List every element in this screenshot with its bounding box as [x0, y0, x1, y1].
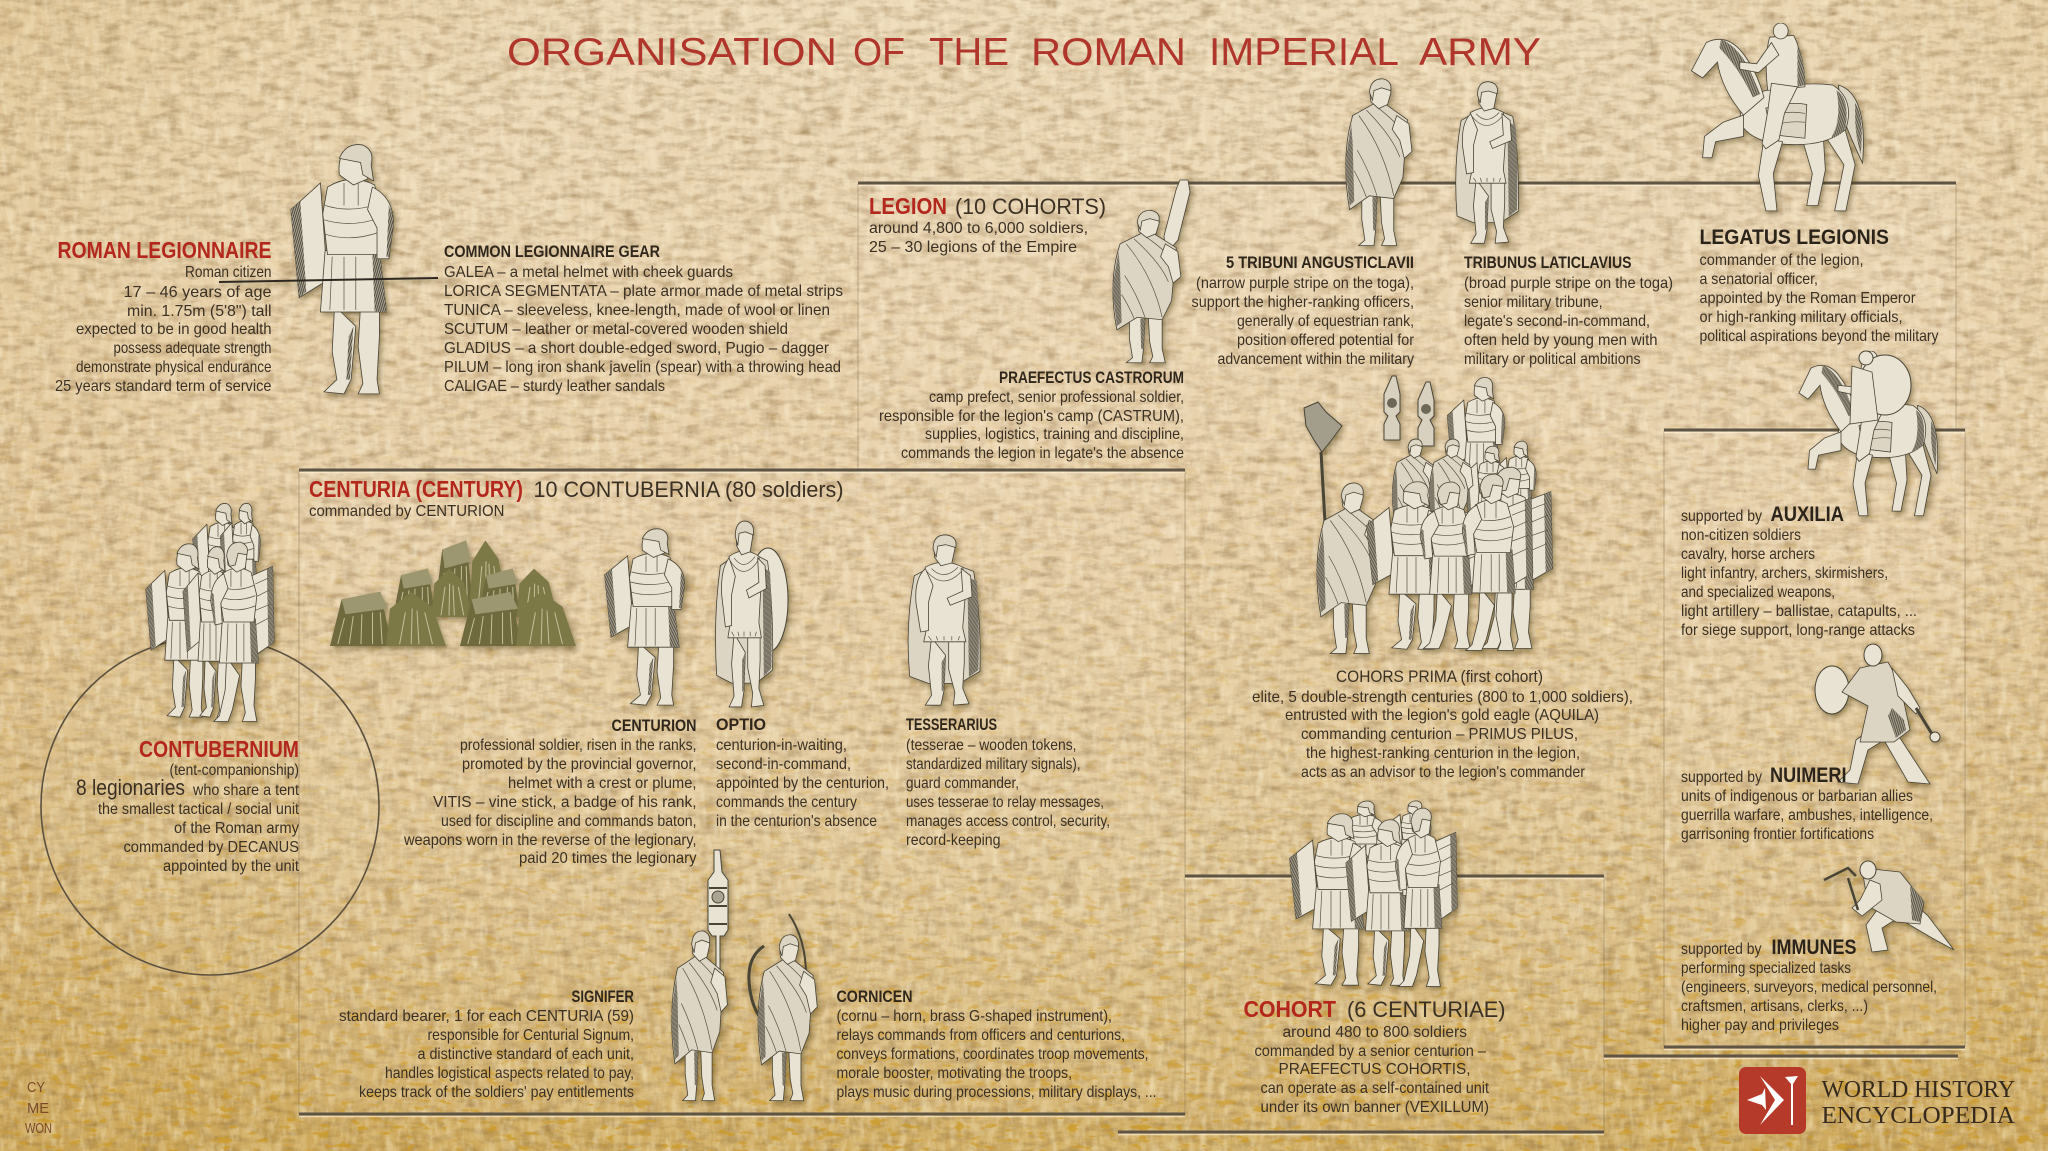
figure: cornicen with horn [749, 914, 817, 1101]
figure: tribunus angusticlavius [1345, 79, 1412, 246]
text: tribuni angusticlavii: (narrow purple stripe on the toga), [1196, 275, 1414, 292]
text: cornicen: CORNICEN [836, 987, 912, 1006]
text: cohors prima: entrusted with the legion's gold eagle (AQUILA) [1285, 707, 1599, 724]
text: common legionnaire gear: LORICA SEGMENTATA – plate armor made of metal strips [444, 283, 843, 300]
heading: centuria [309, 476, 844, 520]
title: ORGANISATION [507, 31, 837, 74]
text: praefectus castrorum: responsible for the legion's camp (CASTRUM), [879, 408, 1184, 425]
text: centurion: VITIS – vine stick, a badge of his rank, [433, 794, 696, 811]
text: legatus legionis: political aspirations beyond the military [1700, 328, 1938, 345]
figure: contubernium group [146, 503, 274, 722]
text: common legionnaire gear [444, 242, 843, 395]
text: legatus legionis: LEGATUS LEGIONIS [1700, 226, 1889, 249]
text: signifer: SIGNIFER [572, 987, 634, 1006]
signature: artist mark: ME [27, 1100, 49, 1117]
text: auxilia: supported by [1681, 508, 1762, 525]
text: immunes: (engineers, surveyors, medical personnel, [1681, 979, 1937, 996]
heading: centuria: CENTURIA (CENTURY) [309, 476, 523, 502]
figure: numeri warrior [1815, 644, 1940, 784]
text: cohors prima [1252, 667, 1633, 781]
text: contubernium: CONTUBERNIUM [139, 736, 299, 762]
text: cornicen: morale booster, motivating the troops, [836, 1065, 1072, 1082]
figure: tribunus laticlavius [1456, 82, 1519, 243]
text: tribuni angusticlavii: 5 TRIBUNI ANGUSTICLAVII [1226, 253, 1414, 272]
text: cornicen: relays commands from officers and centurions, [836, 1027, 1125, 1044]
text: centurion: promoted by the provincial governor, [462, 756, 696, 773]
text: cohort: PRAEFECTUS COHORTIS, [1278, 1061, 1470, 1078]
text: auxilia: cavalry, horse archers [1681, 546, 1815, 563]
text: cornicen: plays music during processions, military displays, ... [836, 1084, 1156, 1101]
text: roman legionnaire: ROMAN LEGIONNAIRE [58, 237, 272, 263]
text: praefectus castrorum [879, 368, 1184, 462]
figure: cohort group [1290, 801, 1457, 987]
text: tribuni angusticlavii [1192, 253, 1415, 368]
text: nuimeri: NUIMERI [1770, 764, 1846, 787]
text: common legionnaire gear: PILUM – long iron shank javelin (spear) with a throwing head [444, 359, 841, 376]
text: roman legionnaire: 17 – 46 years of age [124, 284, 272, 301]
figure: legatus on horseback [1691, 23, 1863, 211]
text: cohors prima: COHORS PRIMA (first cohort) [1336, 667, 1543, 686]
text: immunes: performing specialized tasks [1681, 960, 1851, 977]
text: tesserarius: standardized military signals), [906, 756, 1080, 773]
text: signifer: handles logistical aspects related to pay, [385, 1065, 634, 1082]
text: tesserarius: record-keeping [906, 832, 1000, 849]
text: common legionnaire gear: TUNICA – sleeveless, knee-length, made of wool or linen [444, 302, 830, 319]
text: auxilia: AUXILIA [1770, 503, 1844, 526]
text: immunes: craftsmen, artisans, clerks, ...) [1681, 998, 1868, 1015]
text: legion heading: 25 – 30 legions of the Empire [869, 239, 1077, 256]
text: nuimeri: guerrilla warfare, ambushes, intelligence, [1681, 807, 1933, 824]
text: tribunus laticlavius: (broad purple stripe on the toga) [1464, 275, 1673, 292]
text: legatus legionis: commander of the legion, [1700, 252, 1864, 269]
text: signifer [339, 987, 634, 1101]
title: OF [853, 31, 905, 74]
text: auxilia: non-citizen soldiers [1681, 527, 1801, 544]
text: contubernium: appointed by the unit [163, 858, 300, 875]
text: centurion: paid 20 times the legionary [519, 850, 696, 867]
text: contubernium: 8 legionaries [76, 775, 185, 800]
text: signifer: keeps track of the soldiers' pay entitlements [359, 1084, 634, 1101]
text: signifer: a distinctive standard of each unit, [418, 1046, 634, 1063]
title: THE [929, 31, 1009, 74]
text: roman legionnaire: 25 years standard term of service [55, 378, 272, 395]
text: cohort: COHORT [1244, 996, 1336, 1022]
text: legatus legionis: appointed by the Roman Emperor [1700, 290, 1916, 307]
text: cohort: commanded by a senior centurion – [1254, 1043, 1486, 1060]
text: tesserarius: manages access control, security, [906, 813, 1110, 830]
text: tribunus laticlavius: often held by young men with [1464, 332, 1658, 349]
text: cornicen: (cornu – horn, brass G-shaped instrument), [836, 1008, 1112, 1025]
text: legion heading: (10 COHORTS) [955, 194, 1106, 219]
text: cohort [1244, 996, 1506, 1116]
panel: centuria frame [299, 470, 1185, 1116]
text: tribuni angusticlavii: generally of equestrian rank, [1237, 313, 1414, 330]
text: legion heading: LEGION [869, 193, 947, 219]
text: contubernium: (tent-companionship) [170, 762, 299, 779]
panel: legion frame [858, 183, 1956, 470]
text: cohors prima: acts as an advisor to the legion's commander [1301, 764, 1586, 781]
text: roman legionnaire: possess adequate strength [114, 340, 272, 357]
text: roman legionnaire: expected to be in good health [76, 321, 272, 338]
text: tribuni angusticlavii: position offered potential for [1237, 332, 1415, 349]
text: centurion: weapons worn in the reverse of the legionary, [403, 832, 696, 849]
text: common legionnaire gear: COMMON LEGIONNAIRE GEAR [444, 242, 660, 261]
text: immunes [1681, 936, 1937, 1034]
logo: world history encyclopedia [1739, 1067, 2016, 1134]
title: IMPERIAL [1209, 31, 1399, 74]
text: cornicen: conveys formations, coordinates troop movements, [836, 1046, 1148, 1063]
text: common legionnaire gear: GLADIUS – a short double-edged sword, Pugio – dagger [444, 340, 830, 357]
text: nuimeri: supported by [1681, 769, 1762, 786]
text: nuimeri: garrisoning frontier fortifications [1681, 826, 1874, 843]
text: tribunus laticlavius: military or political ambitions [1464, 351, 1640, 368]
text: tesserarius: guard commander, [906, 775, 1019, 792]
signature: artist mark: WON [25, 1120, 52, 1137]
logo: world history encyclopedia: WORLD HISTORY [1822, 1077, 2015, 1103]
icon: tents [330, 540, 576, 646]
text: optio: second-in-command, [716, 756, 851, 773]
text: auxilia: and specialized weapons, [1681, 584, 1835, 601]
figure: praefectus castrorum [1112, 180, 1190, 363]
text: tribunus laticlavius [1464, 253, 1673, 368]
figure: auxilia cavalry [1799, 351, 1938, 516]
text: tribuni angusticlavii: advancement within the military [1218, 351, 1414, 368]
panel: cohort frame [1118, 876, 1958, 1134]
text: tesserarius: TESSERARIUS [906, 715, 997, 734]
text: praefectus castrorum: camp prefect, senior professional soldier, [929, 389, 1184, 406]
text: legatus legionis [1700, 226, 1938, 345]
figure: optio [715, 521, 788, 707]
text: auxilia [1681, 503, 1917, 639]
signature: artist mark [25, 1079, 52, 1137]
text: immunes: supported by [1681, 941, 1762, 958]
text: signifer: standard bearer, 1 for each CENTURIA (59) [339, 1008, 634, 1025]
text: contubernium [76, 736, 300, 875]
text: optio [716, 715, 889, 830]
figure: tesserarius [908, 535, 980, 705]
text: nuimeri [1681, 764, 1933, 843]
text: common legionnaire gear: GALEA – a metal helmet with cheek guards [444, 264, 733, 281]
text: auxilia: light infantry, archers, skirmishers, [1681, 565, 1888, 582]
text: contubernium: of the Roman army [174, 820, 299, 837]
circle: contubernium [41, 637, 379, 975]
title [507, 31, 1541, 74]
text: praefectus castrorum: supplies, logistics, training and discipline, [925, 426, 1184, 443]
title: ROMAN [1031, 31, 1186, 74]
text: roman legionnaire: demonstrate physical endurance [76, 359, 272, 376]
text: nuimeri: units of indigenous or barbarian allies [1681, 788, 1913, 805]
text: legatus legionis: or high-ranking military officials, [1700, 309, 1902, 326]
text: auxilia: light artillery – ballistae, catapults, ... [1681, 603, 1917, 620]
text: legion heading [869, 193, 1106, 256]
text: optio: centurion-in-waiting, [716, 737, 847, 754]
text: cohort: under its own banner (VEXILLUM) [1260, 1099, 1489, 1116]
text: cohort: can operate as a self-contained unit [1260, 1080, 1490, 1097]
text: immunes: higher pay and privileges [1681, 1017, 1839, 1034]
heading: centuria: commanded by CENTURION [309, 503, 504, 520]
text: cohort: around 480 to 800 soldiers [1282, 1024, 1467, 1041]
text: optio: OPTIO [716, 715, 766, 734]
signature: artist mark: CY [27, 1079, 45, 1096]
text: roman legionnaire [55, 237, 272, 395]
text: tesserarius: (tesserae – wooden tokens, [906, 737, 1076, 754]
text: immunes: IMMUNES [1772, 936, 1856, 959]
text: praefectus castrorum: PRAEFECTUS CASTRORUM [999, 368, 1184, 387]
text: centurion: CENTURION [612, 716, 696, 735]
text: tribunus laticlavius: legate's second-in-command, [1464, 313, 1650, 330]
figure: centurion [605, 529, 685, 705]
text: tribuni angusticlavii: support the higher-ranking officers, [1192, 294, 1414, 311]
text: cohors prima: elite, 5 double-strength centuries (800 to 1,000 soldiers), [1252, 689, 1633, 706]
text: roman legionnaire: min. 1.75m (5'8") tall [127, 303, 272, 320]
text: auxilia: for siege support, long-range attacks [1681, 622, 1915, 639]
figure: cohors prima group [1304, 376, 1553, 654]
figure: roman legionnaire [219, 145, 438, 394]
text: tribunus laticlavius: senior military tribune, [1464, 294, 1602, 311]
text: tesserarius [906, 715, 1110, 849]
text: contubernium: the smallest tactical / social unit [98, 801, 299, 818]
figure: immunes worker [1824, 861, 1954, 952]
text: roman legionnaire: Roman citizen [185, 264, 272, 281]
figure: signifer with standard [671, 850, 728, 1101]
panel: support troops frame [1664, 430, 1965, 1050]
text: contubernium: who share a tent [192, 782, 299, 799]
text: centurion: professional soldier, risen in the ranks, [460, 737, 696, 754]
text: legion heading: around 4,800 to 6,000 soldiers, [869, 220, 1088, 237]
text: cohors prima: the highest-ranking centurion in the legion, [1306, 745, 1580, 762]
text: contubernium: commanded by DECANUS [124, 839, 299, 856]
text: common legionnaire gear: CALIGAE – sturdy leather sandals [444, 378, 665, 395]
text: cornicen [836, 987, 1156, 1101]
text: signifer: responsible for Centurial Signum, [428, 1027, 634, 1044]
text: centurion: used for discipline and commands baton, [441, 813, 696, 830]
text: centurion: helmet with a crest or plume, [508, 775, 696, 792]
text: tesserarius: uses tesserae to relay messages, [906, 794, 1104, 811]
title: ARMY [1419, 31, 1541, 74]
text: centurion [403, 716, 696, 867]
text: common legionnaire gear: SCUTUM – leather or metal-covered wooden shield [444, 321, 788, 338]
text: optio: commands the century [716, 794, 857, 811]
text: praefectus castrorum: commands the legion in legate's the absence [901, 445, 1184, 462]
logo: world history encyclopedia: ENCYCLOPEDIA [1822, 1103, 2016, 1129]
text: tribunus laticlavius: TRIBUNUS LATICLAVIUS [1464, 253, 1632, 272]
text: cohors prima: commanding centurion – PRIMUS PILUS, [1301, 726, 1578, 743]
text: optio: appointed by the centurion, [716, 775, 889, 792]
heading: centuria: 10 CONTUBERNIA (80 soldiers) [534, 477, 844, 502]
text: legatus legionis: a senatorial officer, [1700, 271, 1818, 288]
text: cohort: (6 CENTURIAE) [1347, 997, 1506, 1022]
text: optio: in the centurion's absence [716, 813, 877, 830]
